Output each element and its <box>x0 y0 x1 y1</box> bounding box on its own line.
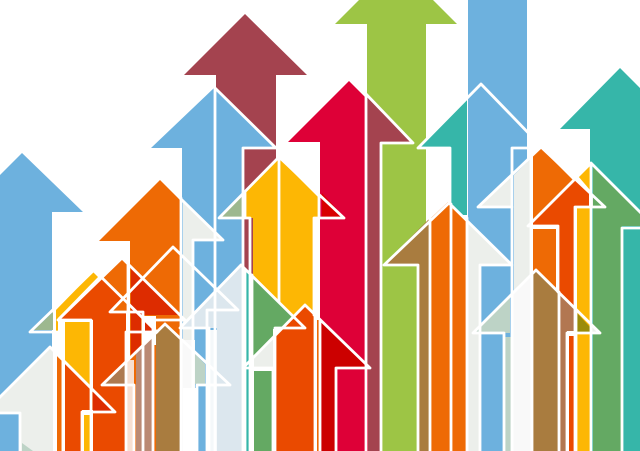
outline: red-orange overlap <box>110 247 238 451</box>
outline: orange-red left <box>58 258 185 451</box>
outline: orange centre right <box>384 203 512 451</box>
arrow: orange-red and red centre bottom <box>275 305 368 451</box>
arrow: yellow centre <box>220 157 344 400</box>
outline: green right <box>528 163 640 451</box>
arrow: crimson centre <box>288 81 413 451</box>
arrow: orange-red left <box>58 258 127 451</box>
outline: teal behind <box>418 84 540 451</box>
arrow: blue shaft top right <box>468 0 527 451</box>
arrow: blue far left <box>0 153 83 451</box>
outline: orange-red centre <box>243 305 370 451</box>
arrow: pale blue centre <box>180 265 317 451</box>
arrow: teal behind blue shaft <box>418 97 468 215</box>
arrow: blue centre left <box>151 88 276 451</box>
arrow: yellow left <box>34 272 98 387</box>
outline: grey bottom left <box>0 347 115 451</box>
outline: orange left <box>180 198 223 451</box>
arrow: teal far right <box>560 68 640 451</box>
outline: pale blue <box>180 265 305 451</box>
arrow: brown bottom right <box>473 271 600 451</box>
arrow: orange left <box>99 180 222 451</box>
arrow: grey and orange upper right <box>478 148 590 292</box>
outline: grey upper right <box>478 147 605 451</box>
outline: crimson <box>366 94 413 451</box>
arrow: maroon top <box>184 14 307 300</box>
arrow: orange and brown centre right <box>384 202 510 451</box>
arrow: grey bottom left <box>0 347 112 451</box>
outline: brown left <box>102 324 230 451</box>
outline: yellow left <box>30 270 157 451</box>
outline: brown bottom right <box>473 270 600 451</box>
outline: blue centre left <box>215 88 276 451</box>
arrow: brown left <box>105 325 205 451</box>
arrow: red-orange overlap <box>111 268 181 358</box>
outline: yellow centre <box>219 157 344 451</box>
arrow: orange-red and green right <box>533 166 640 451</box>
arrow: lime green top <box>335 0 457 451</box>
